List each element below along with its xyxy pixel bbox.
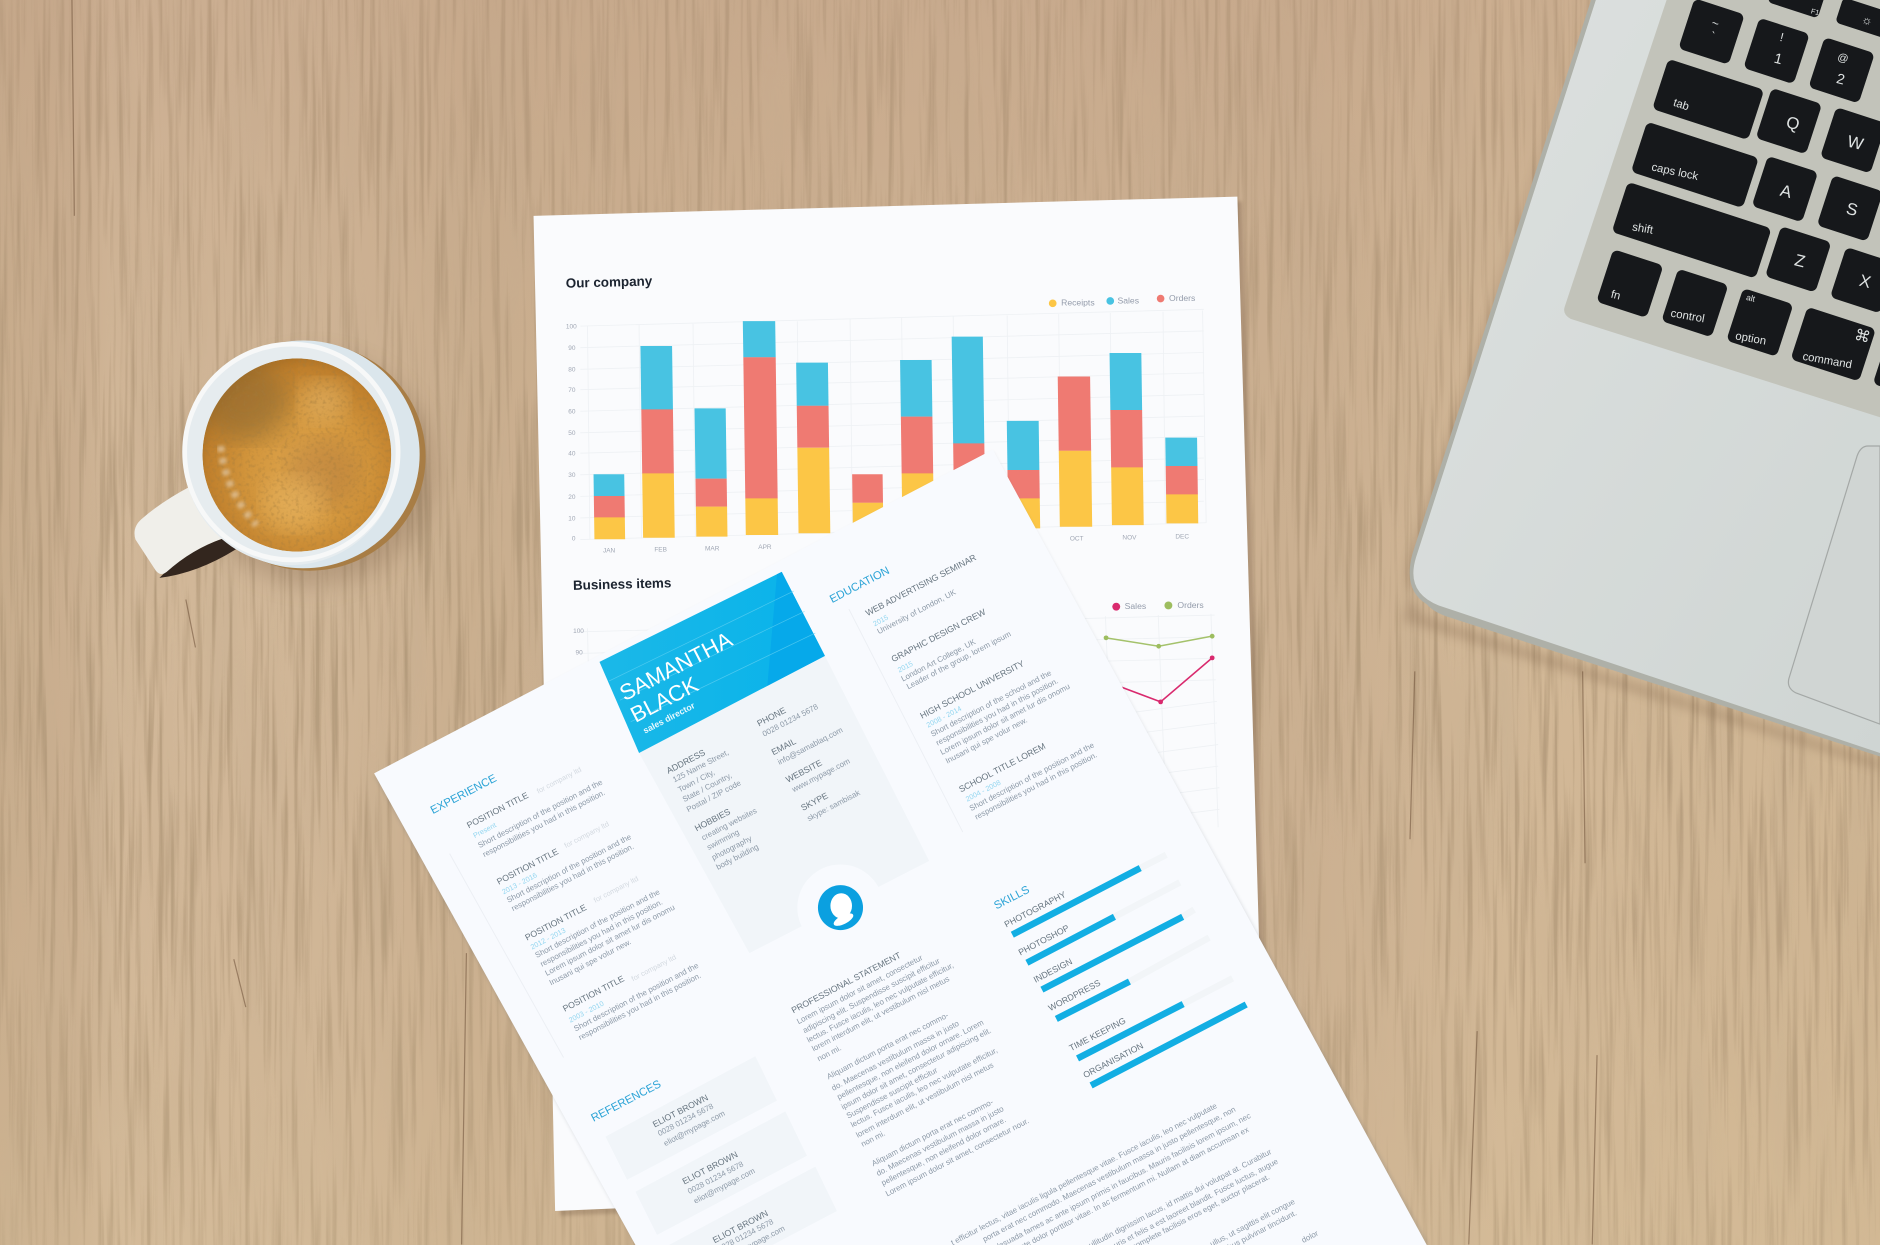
reference 1: 0028 01234 5678 bbox=[656, 1101, 715, 1138]
section: skills bbox=[992, 855, 1246, 1085]
experience entry 2: 2013 - 2016 bbox=[500, 870, 539, 896]
experience entry 1: Present bbox=[472, 820, 498, 840]
month labels: NOV bbox=[1122, 535, 1137, 542]
experience entry 4: POSITION TITLE bbox=[561, 973, 626, 1014]
experience entry 2: POSITION TITLE bbox=[495, 846, 560, 887]
key legends: ~ bbox=[1710, 16, 1720, 31]
icon: profile avatar bbox=[818, 885, 863, 930]
y axis labels: 50 bbox=[568, 430, 576, 437]
experience entry 3: Short description of the position and the bbox=[534, 887, 662, 960]
y axis labels: 80 bbox=[568, 367, 576, 374]
section: professional statement: lectus. Fusce iaculis, leo nec vulputate efficitur, bbox=[849, 1046, 999, 1129]
section: professional statement: pellentesque, non eleifend dolor ornare. Lorem bbox=[836, 1018, 986, 1102]
contact details: PHONE bbox=[755, 705, 788, 728]
section: education: SCHOOL TITLE LOREM bbox=[957, 741, 1047, 794]
section: professional statement: do. Maecenas vestibulum massa in justo bbox=[830, 1019, 961, 1093]
key legends: A bbox=[1778, 181, 1795, 202]
name banner bbox=[599, 572, 825, 753]
contact details: info@samablaq.com bbox=[776, 725, 845, 767]
bar: JAN bbox=[594, 474, 625, 539]
key legends: ☼ bbox=[1860, 12, 1874, 28]
section: education: responsibilities you had in this position. bbox=[934, 676, 1060, 748]
skill labels: TIME KEEPING bbox=[1067, 1015, 1127, 1053]
reference 1 bbox=[651, 1092, 727, 1148]
section: education: EDUCATION bbox=[828, 565, 892, 606]
month labels: FEB bbox=[654, 547, 667, 554]
trackpad bbox=[1788, 446, 1880, 724]
experience entry 3: POSITION TITLE bbox=[523, 902, 588, 942]
sheet bbox=[374, 450, 1427, 1245]
key legends: ` bbox=[1709, 29, 1716, 43]
bar: NOV bbox=[1110, 353, 1144, 525]
bar: FEB bbox=[640, 346, 675, 538]
contact details: ADDRESS bbox=[665, 747, 707, 776]
section: education: Short description of the position and the bbox=[968, 740, 1096, 813]
key legends bbox=[1610, 6, 1874, 371]
key legends: F1 bbox=[1810, 6, 1820, 17]
contact details: State / Country, bbox=[681, 771, 733, 804]
y axis labels bbox=[566, 324, 577, 543]
section: education: HIGH SCHOOL UNIVERSITY bbox=[918, 658, 1026, 721]
legend: receipts, sales, orders bbox=[1049, 293, 1195, 308]
contact details: body building bbox=[715, 842, 760, 872]
cup shadow bbox=[194, 355, 434, 585]
key legends: control bbox=[1670, 308, 1705, 325]
experience entry 1: Short description of the position and the bbox=[476, 777, 605, 850]
month labels: DEC bbox=[1175, 533, 1189, 540]
reference 3: ELIOT BROWN bbox=[711, 1208, 770, 1245]
experience entry 3: 2012 - 2013 bbox=[529, 926, 567, 951]
bar: AUG bbox=[952, 337, 986, 530]
key legends: fn bbox=[1610, 289, 1622, 303]
legend: receipts, sales, orders: Orders bbox=[1169, 293, 1195, 303]
y axis labels: 0 bbox=[572, 536, 576, 543]
keys bbox=[1596, 0, 1880, 400]
section: education: WEB ADVERTISING SEMINAR bbox=[864, 552, 978, 618]
line chart axis labels bbox=[573, 628, 584, 657]
experience entry 3: responsibilities you had in this position. bbox=[539, 898, 664, 969]
experience entry 4: responsibilities you had in this position. bbox=[577, 971, 702, 1042]
key legends: 2 bbox=[1835, 71, 1846, 89]
bar: JUN bbox=[852, 474, 883, 532]
laptop rim bbox=[1410, 0, 1880, 757]
contact details: photography bbox=[710, 834, 753, 862]
contact details: WEBSITE bbox=[784, 758, 824, 785]
section: skills: SKILLS bbox=[992, 884, 1032, 912]
section: professional statement: non mi. bbox=[860, 1129, 887, 1149]
section: professional statement: non mi. bbox=[816, 1043, 843, 1063]
section: education: Leader of the group, lorem ipsum bbox=[905, 629, 1013, 691]
bar: MAY bbox=[796, 363, 830, 533]
heading: business items: Business items bbox=[573, 575, 672, 593]
name: SAMANTHA bbox=[615, 627, 736, 706]
laptop palm rest bbox=[1413, 0, 1880, 753]
key legends: tab bbox=[1672, 97, 1690, 113]
bottom paragraphs: t efficitur lectus, vitae iaculis ligula pellentesque vitae. Fusce iaculis, leo nec vulputate bbox=[949, 1101, 1219, 1245]
section: professional statement: PROFESSIONAL STATEMENT bbox=[790, 950, 903, 1015]
reference 1: ELIOT BROWN bbox=[651, 1092, 710, 1129]
sheet shadow bbox=[374, 452, 1429, 1245]
skill labels: PHOTOSHOP bbox=[1017, 923, 1071, 957]
line chart grid bbox=[580, 614, 1219, 827]
skill bar tracks bbox=[1114, 855, 1233, 1004]
line chart axis labels: 90 bbox=[576, 650, 583, 657]
key legends: X bbox=[1857, 271, 1873, 292]
experience entry 4: for company ltd bbox=[630, 952, 678, 983]
saucer bbox=[193, 343, 426, 571]
section: professional statement: do. Maecenas vestibulum massa in justo bbox=[875, 1104, 1006, 1178]
line chart: sales bbox=[1121, 655, 1215, 704]
experience entry 2: Short description of the position and the bbox=[505, 832, 633, 905]
experience entry 3: Lorem ipsum dolor sit amet lur dis onomu bbox=[544, 903, 676, 978]
contact details: 0028 01234 5678 bbox=[761, 702, 820, 739]
y axis labels: 20 bbox=[568, 494, 576, 501]
bottom paragraphs: dolor bbox=[1300, 1229, 1320, 1245]
y axis labels: 10 bbox=[568, 515, 576, 522]
key legends: Q bbox=[1784, 113, 1802, 134]
contact details: creating websites bbox=[700, 806, 758, 842]
contact details: HOBBIES bbox=[693, 806, 732, 833]
section: education bbox=[828, 552, 1099, 822]
sheet shadow bbox=[536, 201, 1264, 1216]
section: professional statement: lectus. Fusce iaculis, leo nec vulputate efficitur, bbox=[805, 961, 955, 1045]
job title: sales director bbox=[641, 700, 697, 736]
mug rim bbox=[183, 343, 400, 565]
key legends: S bbox=[1844, 199, 1860, 220]
contact details: 125 Name Street, bbox=[671, 748, 730, 784]
experience entry 4: Short description of the position and the bbox=[572, 961, 701, 1033]
experience entry 1: for company ltd bbox=[535, 765, 583, 795]
reference 2: 0028 01234 5678 bbox=[686, 1159, 745, 1196]
handle bbox=[135, 486, 223, 574]
bar: APR bbox=[743, 321, 778, 535]
key legends: Z bbox=[1793, 250, 1807, 271]
section: references: REFERENCES bbox=[589, 1078, 663, 1125]
month labels: OCT bbox=[1070, 536, 1084, 543]
y axis labels: 70 bbox=[568, 387, 576, 394]
key legends: shift bbox=[1631, 221, 1655, 237]
line chart legend bbox=[1112, 600, 1204, 611]
section: education: University of London, UK bbox=[876, 587, 958, 636]
laptop shadow bbox=[1403, 0, 1880, 770]
section: references bbox=[589, 1056, 837, 1245]
y axis labels: 30 bbox=[568, 472, 576, 479]
y axis labels: 90 bbox=[568, 345, 576, 352]
experience entry 3: Inusani qui spe volur new. bbox=[548, 937, 633, 987]
month labels: JAN bbox=[603, 548, 616, 555]
skill labels: ORGANISATION bbox=[1081, 1040, 1145, 1080]
month labels: APR bbox=[758, 544, 772, 551]
experience entry 4: 2003 - 2010 bbox=[567, 999, 605, 1024]
section: professional statement bbox=[790, 950, 1030, 1198]
month labels: MAR bbox=[705, 545, 720, 552]
skill labels: INDESIGN bbox=[1032, 956, 1074, 985]
bar: MAR bbox=[695, 408, 727, 537]
key legends: command bbox=[1802, 351, 1853, 371]
section: professional statement: Lorem ipsum dolor sit amet, consectetur bbox=[795, 953, 924, 1026]
experience entry 1 bbox=[465, 765, 607, 859]
section: professional statement: Suspendisse suscipit efficitur bbox=[845, 1065, 939, 1120]
section: experience: EXPERIENCE bbox=[429, 772, 499, 817]
bar: OCT bbox=[1058, 376, 1092, 527]
section: education: 2004 - 2008 bbox=[964, 778, 1002, 804]
section: professional statement: Aliquam dictum porta erat nec commo- bbox=[870, 1097, 995, 1168]
line chart axis labels: 100 bbox=[573, 628, 584, 635]
contact details: EMAIL bbox=[770, 736, 798, 757]
heading: our company: Our company bbox=[566, 273, 653, 291]
key legends: ! bbox=[1779, 30, 1785, 44]
section: education: 2008 - 2014 bbox=[925, 704, 963, 730]
line chart legend: Orders bbox=[1177, 600, 1204, 610]
section: education: London Art College, UK bbox=[900, 637, 978, 683]
bar: JUL bbox=[900, 360, 934, 532]
section: education: Inusani qui spe volur new. bbox=[944, 716, 1029, 766]
contact details: www.mypage.com bbox=[790, 756, 852, 795]
contact details: skype: sambisak bbox=[806, 788, 862, 823]
skill labels bbox=[1003, 889, 1145, 1080]
reference 2: ELIOT BROWN bbox=[681, 1149, 739, 1186]
name banner: BLACK bbox=[626, 672, 702, 727]
bottom paragraphs: porta erat nec commodo. Maecenas vestibulum massa in justo pellentesque, non bbox=[981, 1105, 1237, 1244]
experience entry 1: POSITION TITLE bbox=[465, 790, 530, 830]
bar: SEP bbox=[1007, 421, 1040, 528]
skill labels: PHOTOGRAPHY bbox=[1003, 889, 1068, 929]
experience entry 2: for company ltd bbox=[563, 819, 610, 850]
key legends: option bbox=[1734, 330, 1767, 348]
skill labels: WORDPRESS bbox=[1047, 978, 1102, 1013]
coffee surface bbox=[198, 354, 396, 558]
keyboard well bbox=[1564, 0, 1880, 417]
legend: receipts, sales, orders: Receipts bbox=[1061, 298, 1095, 308]
section: education: 2015 bbox=[871, 613, 890, 628]
section: education: 2015 bbox=[896, 659, 914, 674]
key legends: W bbox=[1845, 132, 1866, 154]
section: education: Lorem ipsum dolor sit amet lur dis onomu bbox=[939, 682, 1071, 757]
handle underside bbox=[159, 538, 236, 578]
experience entry 1: responsibilities you had in this position. bbox=[481, 788, 607, 859]
contact details: SKYPE bbox=[799, 790, 830, 813]
stacked bar chart bbox=[591, 321, 1198, 539]
reference 1: eliot@mypage.com bbox=[662, 1109, 727, 1148]
section: professional statement: Aliquam dictum porta erat nec commo- bbox=[825, 1010, 950, 1081]
legend: receipts, sales, orders: Sales bbox=[1117, 295, 1139, 305]
contact details: swimming bbox=[705, 828, 741, 852]
key legends: caps lock bbox=[1650, 161, 1700, 183]
key legends: @ bbox=[1836, 51, 1850, 66]
section: professional statement: lorem interdum elit, ut vestibulum nisl metus bbox=[810, 974, 951, 1053]
skill bars bbox=[1012, 868, 1246, 1085]
contact details: Postal / ZIP code bbox=[685, 778, 743, 814]
section: experience bbox=[429, 765, 702, 1042]
laptop bbox=[1403, 0, 1880, 770]
sheet bbox=[534, 197, 1265, 1211]
page: resume sheet bbox=[374, 450, 1429, 1245]
contact panel bbox=[639, 656, 929, 953]
reference 2: eliot@mypage.com bbox=[692, 1166, 757, 1206]
experience entry 3 bbox=[523, 874, 676, 987]
section: professional statement: ipsum dolor sit amet, consectetur adipiscing elit. bbox=[840, 1026, 993, 1111]
y axis labels: 40 bbox=[568, 451, 576, 458]
contact details bbox=[665, 702, 862, 872]
experience entry 3: for company ltd bbox=[592, 874, 640, 905]
experience entry 2: responsibilities you had in this position. bbox=[510, 842, 635, 913]
key legends: ⌘ bbox=[1853, 327, 1872, 347]
coffee cup on saucer bbox=[135, 341, 434, 585]
section: education: responsibilities you had in this position. bbox=[973, 750, 1099, 822]
y axis labels: 60 bbox=[568, 409, 576, 416]
contact details: Town / City, bbox=[676, 768, 716, 794]
section: professional statement: Lorem ipsum dolor sit amet, consectetur nour. bbox=[884, 1116, 1030, 1198]
section: education: GRAPHIC DESIGN CREW bbox=[890, 606, 988, 664]
bar: DEC bbox=[1165, 438, 1198, 523]
key legends: alt bbox=[1745, 292, 1757, 304]
section: professional statement: adipiscing elit. Suspendisse suscipit efficitur bbox=[801, 956, 942, 1035]
line chart legend: Sales bbox=[1125, 601, 1146, 611]
avatar halo bbox=[797, 864, 884, 951]
key legends: 1 bbox=[1772, 51, 1784, 68]
section: professional statement: pellentesque, non eleifend dolor ornare. bbox=[880, 1115, 1008, 1188]
section: professional statement: lorem interdum elit, ut vestibulum nisl metus bbox=[855, 1061, 995, 1140]
chart grid bbox=[580, 309, 1206, 540]
page: company charts sheet bbox=[534, 197, 1265, 1216]
y axis labels: 100 bbox=[566, 324, 577, 331]
reference 2 bbox=[681, 1149, 757, 1206]
line chart: orders bbox=[1104, 634, 1215, 649]
section rules bbox=[450, 609, 963, 1057]
month labels bbox=[603, 533, 1189, 555]
section: education: Short description of the school and the bbox=[929, 668, 1053, 739]
